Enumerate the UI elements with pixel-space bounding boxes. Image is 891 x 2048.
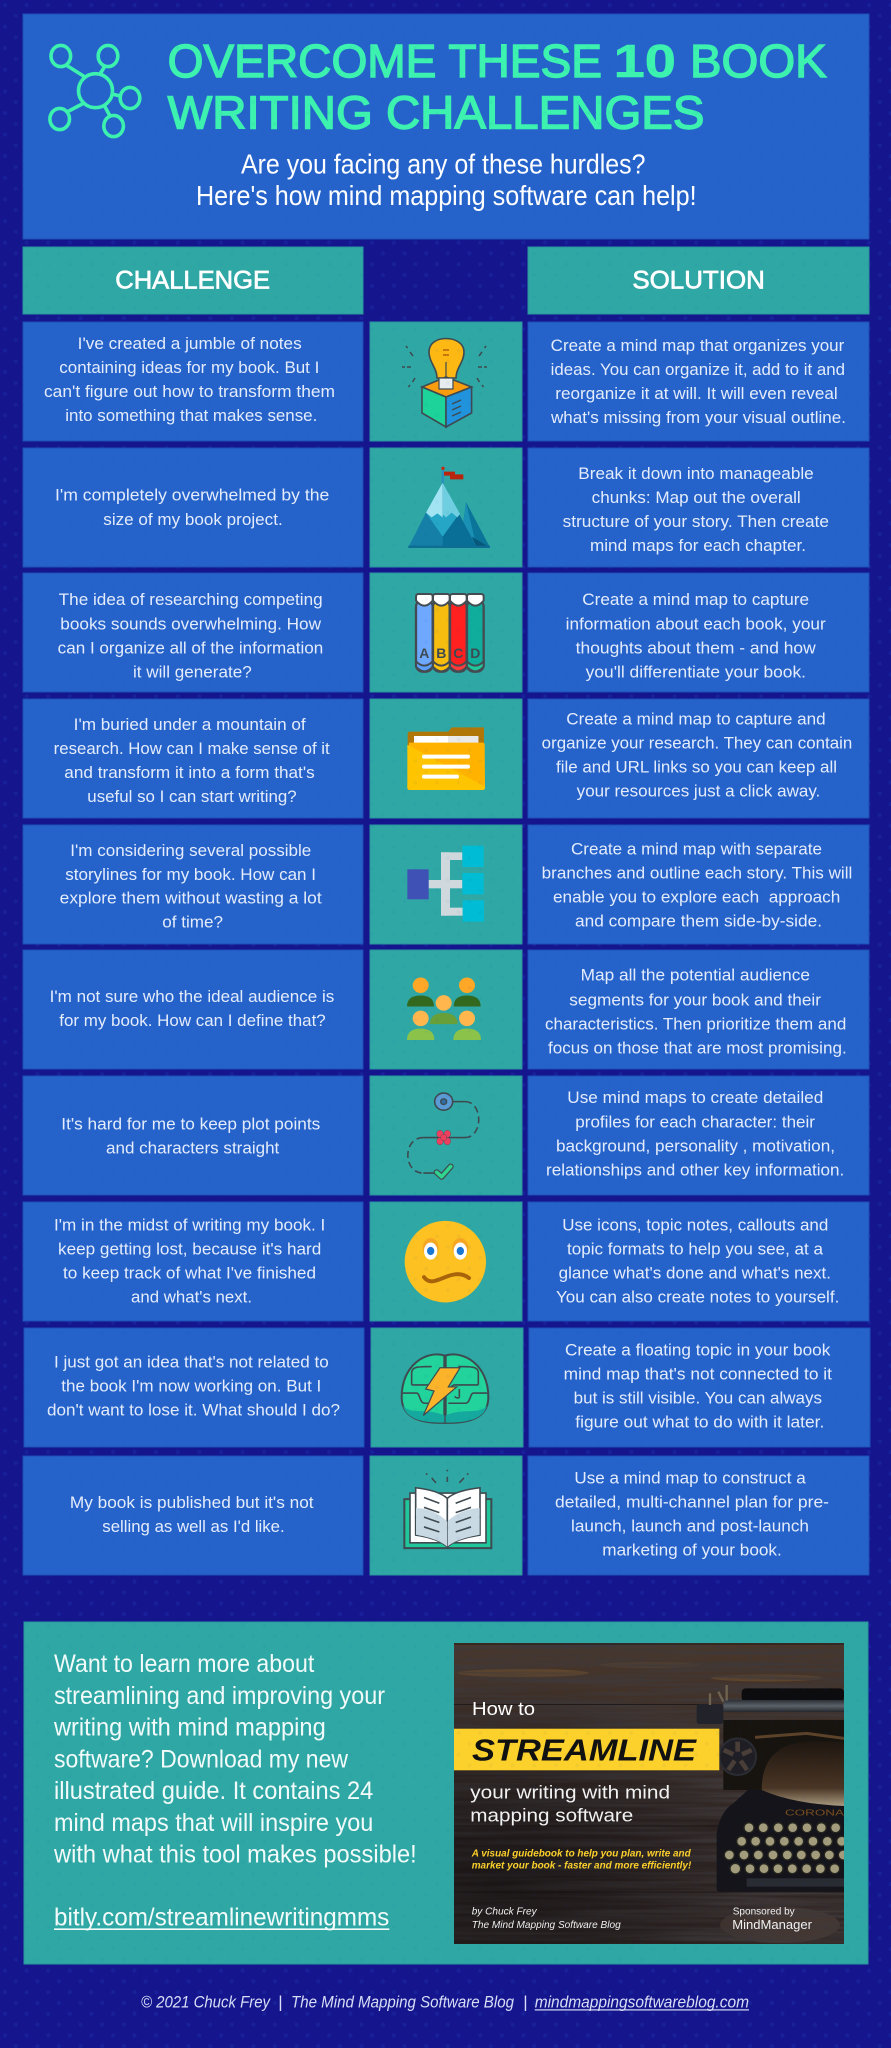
icon cell: open book <box>370 1456 522 1575</box>
column heading: challenge: CHALLENGE <box>115 267 270 295</box>
solution 6: Map all the potential audience <box>581 967 810 985</box>
solution 5: Create a mind map with separate <box>571 841 822 859</box>
subtitle: Here's how mind mapping software can help! <box>196 180 697 211</box>
challenge 6 <box>23 950 363 1069</box>
cover banner: streamline <box>454 1729 719 1770</box>
solution 1 <box>528 322 869 441</box>
solution 1: Create a mind map that organizes your <box>551 337 845 355</box>
cover author: The Mind Mapping Software Blog <box>472 1919 621 1931</box>
cover author: by Chuck Frey <box>472 1905 537 1917</box>
challenge 4: and transform it into a form that's <box>64 764 315 782</box>
solution 3 <box>528 573 869 692</box>
icon cell: tree diagram <box>370 825 522 944</box>
cover tagline: A visual guidebook to help you plan, write and <box>471 1849 692 1860</box>
call to action text: illustrated guide. It contains 24 <box>54 1777 373 1805</box>
challenge 9: the book I'm now working on. But I <box>61 1378 321 1396</box>
footer credit <box>141 1992 749 2011</box>
challenge 1: into something that makes sense. <box>65 407 317 425</box>
solution 2: structure of your story. Then create <box>563 513 829 531</box>
solution 5 <box>528 825 869 944</box>
solution 9: figure out what to do with it later. <box>575 1414 824 1432</box>
icon cell: row of books: B <box>436 645 446 661</box>
footer credit: | <box>278 1992 282 2011</box>
challenge 8 <box>23 1202 363 1321</box>
subtitle: Are you facing any of these hurdles? <box>241 149 646 180</box>
row 2 <box>23 448 869 567</box>
challenge 7 <box>23 1076 363 1195</box>
row 8 <box>23 1202 869 1321</box>
solution 6: characteristics. Then prioritize them and <box>545 1015 846 1033</box>
challenge 5: explore them without wasting a lot <box>60 889 322 907</box>
solution 5: branches and outline each story. This will <box>542 865 852 883</box>
solution 3: Create a mind map to capture <box>582 591 809 609</box>
challenge 10: My book is published but it's not <box>70 1494 314 1512</box>
solution 10: detailed, multi-channel plan for pre- <box>555 1493 829 1511</box>
challenge 5: of time? <box>162 913 223 931</box>
column heading: solution: SOLUTION <box>632 267 765 295</box>
icon cell: folder <box>370 699 522 818</box>
solution 7: Use mind maps to create detailed <box>567 1089 823 1107</box>
solution 4: organize your research. They can contain <box>542 735 852 753</box>
challenge 3: it will generate? <box>133 664 252 682</box>
cover subtitle: your writing with mind <box>470 1782 670 1802</box>
challenge 2: size of my book project. <box>103 511 283 529</box>
call to action text: software? Download my new <box>54 1745 349 1773</box>
solution 9: mind map that's not connected to it <box>564 1366 832 1384</box>
subtitle <box>196 149 697 211</box>
title <box>168 35 827 138</box>
cover subtitle <box>470 1782 670 1826</box>
challenge 3 <box>23 573 363 692</box>
icon cell: mountain with flag <box>370 448 522 567</box>
cover tagline <box>471 1849 692 1872</box>
title: WRITING CHALLENGES <box>168 86 705 138</box>
challenge 6: for my book. How can I define that? <box>59 1012 326 1030</box>
footer credit: | <box>523 1992 527 2011</box>
challenge 2 <box>23 448 363 567</box>
icon cell: light bulb box <box>370 322 522 441</box>
challenge 6: I'm not sure who the ideal audience is <box>50 988 334 1006</box>
solution 4: Create a mind map to capture and <box>566 711 826 729</box>
challenge 1: can't figure out how to transform them <box>44 383 335 401</box>
row 9 <box>24 1328 870 1447</box>
solution 10 <box>528 1456 869 1575</box>
title: 10 <box>614 35 676 87</box>
challenge 8: I'm in the midst of writing my book. I <box>54 1216 325 1234</box>
icon cell: route path <box>370 1076 522 1195</box>
challenge 5 <box>23 825 363 944</box>
cover sponsor: MindManager <box>732 1917 813 1932</box>
call to action text: mind maps that will inspire you <box>54 1809 373 1837</box>
challenge 1: containing ideas for my book. But I <box>59 359 319 377</box>
footer credit: The Mind Mapping Software Blog <box>291 1992 514 2011</box>
cover banner: streamline: STREAMLINE <box>472 1732 698 1767</box>
solution 9: but is still visible. You can always <box>574 1390 822 1408</box>
solution 4 <box>528 699 869 818</box>
challenge 9 <box>24 1328 364 1447</box>
challenge 7: It's hard for me to keep plot points <box>61 1116 320 1134</box>
cover subtitle: mapping software <box>470 1806 633 1826</box>
icon cell: row of books: C <box>453 645 463 661</box>
icon cell: brain with lightning <box>371 1328 523 1447</box>
call to action text <box>53 1650 417 1868</box>
cover author <box>472 1907 621 1930</box>
column heading: solution <box>528 247 869 314</box>
panel: download guide call to action <box>24 1622 868 1964</box>
solution 5: enable you to explore each approach <box>553 889 840 907</box>
solution 10: Use a mind map to construct a <box>574 1469 807 1487</box>
solution 5: and compare them side-by-side. <box>575 913 822 931</box>
row 3 <box>23 573 869 692</box>
solution 7: background, personality , motivation, <box>556 1138 835 1156</box>
challenge 10: selling as well as I'd like. <box>102 1518 285 1536</box>
solution 1: ideas. You can organize it, add to it and <box>551 361 845 379</box>
row 7 <box>23 1076 869 1195</box>
solution 8: glance what's done and what's next. <box>559 1264 831 1282</box>
call to action text: Want to learn more about <box>54 1650 314 1678</box>
row 4 <box>23 699 869 818</box>
challenge 3: The idea of researching competing <box>59 591 323 609</box>
challenge 8: and what's next. <box>131 1288 252 1306</box>
challenge 3: books sounds overwhelming. How <box>60 616 321 634</box>
cover sponsor <box>732 1905 813 1932</box>
challenge 4 <box>23 699 363 818</box>
challenge 10 <box>23 1456 363 1575</box>
guide cover <box>454 1643 848 1944</box>
solution 1: reorganize it at will. It will even reveal <box>555 385 838 403</box>
solution 6: focus on those that are most promising. <box>548 1039 847 1057</box>
solution 9 <box>529 1328 870 1447</box>
icon cell: audience group <box>370 950 522 1069</box>
solution 8: Use icons, topic notes, callouts and <box>562 1216 828 1234</box>
solution 7: profiles for each character: their <box>575 1114 816 1132</box>
solution 9: Create a floating topic in your book <box>565 1342 831 1360</box>
challenge 3: can I organize all of the information <box>58 640 323 658</box>
cover tagline: market your book - faster and more efficiently! <box>472 1861 692 1872</box>
icon cell: row of books: A <box>419 645 429 661</box>
challenge 9: don't want to lose it. What should I do? <box>47 1402 340 1420</box>
solution 3: you'll differentiate your book. <box>586 664 806 682</box>
footer credit: © 2021 Chuck Frey <box>141 1992 271 2011</box>
column heading: challenge <box>23 247 363 314</box>
solution 8: topic formats to help you see, at a <box>567 1240 824 1258</box>
solution 4: file and URL links so you can keep all <box>556 759 837 777</box>
challenge 7: and characters straight <box>106 1140 280 1158</box>
solution 3: thoughts about them - and how <box>576 640 816 658</box>
title: BOOK <box>690 35 827 87</box>
challenge 9: I just got an idea that's not related to <box>54 1354 329 1372</box>
row 6 <box>23 950 869 1069</box>
solution 2: mind maps for each chapter. <box>590 537 806 555</box>
challenge 2: I'm completely overwhelmed by the <box>55 487 329 505</box>
challenge 1 <box>23 322 363 441</box>
challenge 4: research. How can I make sense of it <box>54 740 330 758</box>
icon cell: confused face <box>370 1202 522 1321</box>
challenge 8: keep getting lost, because it's hard <box>58 1240 321 1258</box>
solution 2: Break it down into manageable <box>578 465 814 483</box>
challenge 5: storylines for my book. How can I <box>65 866 316 884</box>
title: OVERCOME THESE <box>168 35 602 87</box>
challenge 5: I'm considering several possible <box>70 842 311 860</box>
solution 7: relationships and other key information. <box>546 1162 844 1180</box>
solution 3: information about each book, your <box>566 616 826 634</box>
row 1 <box>23 322 869 441</box>
typewriter illustration <box>697 1685 848 1892</box>
guide link: bitly.com/streamlinewritingmms <box>54 1904 389 1932</box>
call to action text: writing with mind mapping <box>53 1714 326 1742</box>
row 10 <box>23 1456 869 1575</box>
solution 8: You can also create notes to yourself. <box>556 1288 839 1306</box>
header panel <box>23 14 869 239</box>
solution 7 <box>528 1076 869 1195</box>
solution 10: marketing of your book. <box>602 1541 782 1559</box>
cover text: how to: How to <box>472 1698 535 1719</box>
solution 8 <box>528 1202 869 1321</box>
challenge 4: useful so I can start writing? <box>87 788 297 806</box>
cover sponsor: Sponsored by <box>733 1905 795 1917</box>
icon cell: row of books: D <box>470 645 480 661</box>
row 5 <box>23 825 869 944</box>
challenge 1: I've created a jumble of notes <box>78 335 302 353</box>
solution 2 <box>528 448 869 567</box>
solution 10: launch, launch and post-launch <box>571 1517 809 1535</box>
challenge 8: to keep track of what I've finished <box>63 1264 316 1282</box>
icon: mind map network <box>50 45 140 137</box>
icon cell: row of books <box>370 573 522 692</box>
solution 6 <box>528 950 869 1069</box>
footer credit: mindmappingsoftwareblog.com <box>535 1992 749 2011</box>
call to action text: streamlining and improving your <box>54 1682 385 1710</box>
solution 4: your resources just a click away. <box>577 783 820 801</box>
call to action text: with what this tool makes possible! <box>53 1840 417 1868</box>
challenge 4: I'm buried under a mountain of <box>74 716 306 734</box>
solution 6: segments for your book and their <box>569 991 822 1009</box>
solution 1: what's missing from your visual outline. <box>550 409 846 427</box>
solution 2: chunks: Map out the overall <box>592 489 801 507</box>
typewriter illustration: CORONA <box>785 1809 845 1818</box>
